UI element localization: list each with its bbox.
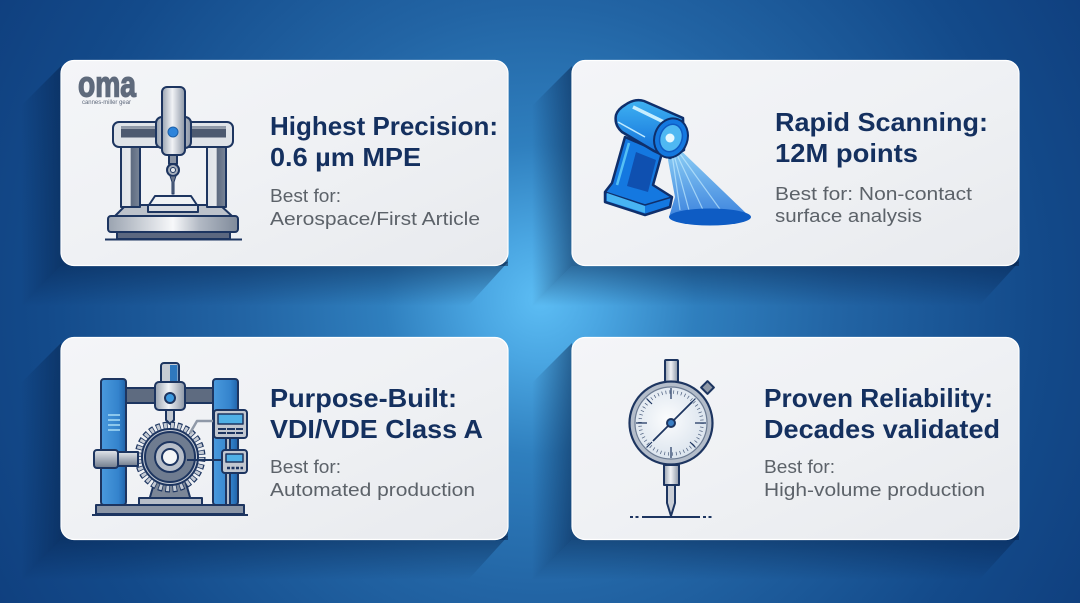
heading: Purpose-Built: [270, 383, 457, 413]
use case text [270, 186, 480, 229]
heading: Rapid Scanning: [775, 107, 988, 137]
logo: OMA: cannes-miller gear [82, 99, 132, 106]
use case text [764, 457, 985, 500]
heading [775, 107, 988, 168]
use case text: Best for: [270, 457, 341, 477]
panel: rapid scanning [532, 60, 1019, 306]
heading [270, 383, 483, 444]
use case text: Best for: Non-contact [775, 184, 972, 204]
icon: coordinate measuring machine [105, 87, 242, 240]
use case text: surface analysis [775, 206, 922, 226]
logo: OMA: oma [78, 64, 137, 104]
heading [764, 383, 1000, 444]
panel: purpose-built [21, 338, 508, 580]
use case text: High-volume production [764, 480, 985, 500]
use case text [270, 457, 475, 500]
use case text: Best for: [764, 457, 835, 477]
heading [270, 111, 498, 172]
heading: 0.6 µm MPE [270, 142, 421, 172]
heading: Proven Reliability: [764, 383, 993, 413]
icon: laser scanner [605, 100, 751, 226]
panel: proven reliability [532, 338, 1019, 580]
use case text: Best for: [270, 186, 341, 206]
heading: 12M points [775, 138, 918, 168]
use case text [775, 184, 972, 226]
use case text: Automated production [270, 480, 475, 500]
heading: Highest Precision: [270, 111, 498, 141]
use case text: Aerospace/First Article [270, 209, 480, 229]
icon: dial indicator [630, 360, 714, 517]
panel: highest precision [21, 60, 508, 306]
heading: VDI/VDE Class A [270, 414, 483, 444]
heading: Decades validated [764, 414, 1000, 444]
icon: gear inspection machine [92, 363, 248, 515]
